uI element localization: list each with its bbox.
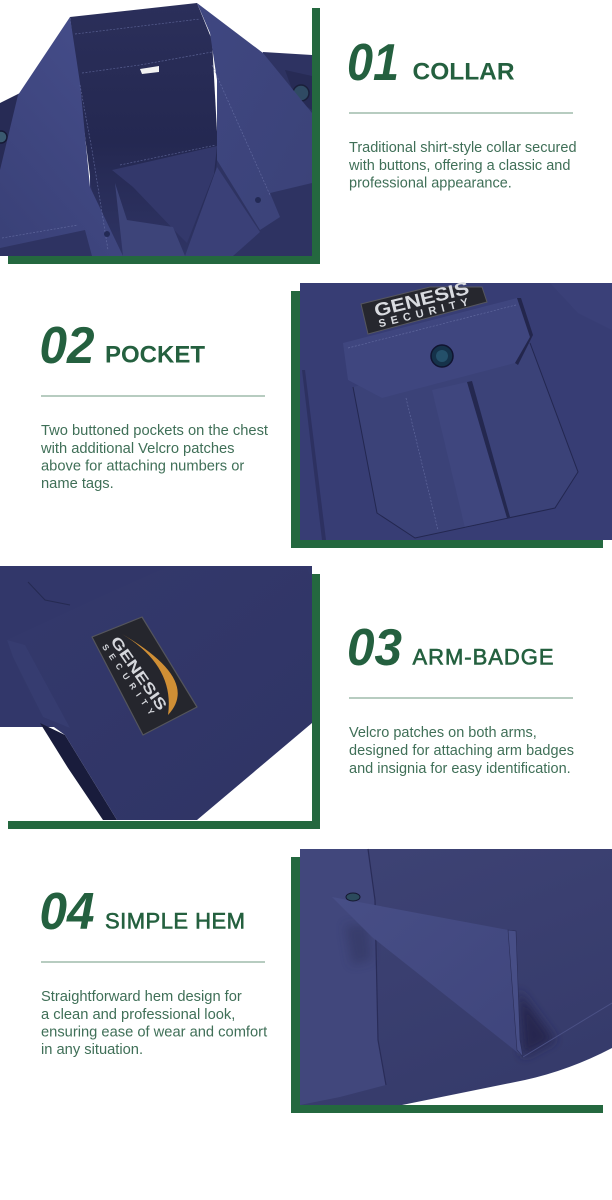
panel: arm-badge photo	[0, 566, 320, 829]
text: hem description: a clean and professional look,	[41, 1007, 235, 1023]
illustration: collar shirt	[0, 3, 312, 256]
text: hem description: in any situation.	[41, 1042, 143, 1058]
frame: arm-badge green border	[8, 574, 320, 829]
text: arm-badge description: and insignia for easy identification.	[349, 761, 571, 777]
text: hem description	[41, 989, 267, 1058]
panel: pocket photo	[291, 277, 612, 548]
heading: 04 simple hem: 04	[40, 883, 95, 941]
text: collar description: Traditional shirt-style collar secured	[349, 140, 577, 156]
panel: collar photo	[0, 3, 320, 264]
heading: 01 collar: COLLAR	[412, 58, 515, 86]
frame: pocket green border	[291, 291, 603, 548]
badge text: genesis security: SECURITY	[377, 296, 470, 330]
illustration: pocket shirt	[300, 277, 612, 540]
text: pocket description: name tags.	[41, 476, 114, 492]
text: arm-badge description	[349, 725, 574, 777]
heading: 01 collar	[347, 34, 515, 92]
frame: hem green border	[291, 857, 603, 1113]
heading: 02 pocket: POCKET	[105, 342, 205, 368]
heading: 04 simple hem: SIMPLE HEM	[105, 908, 245, 934]
heading: 03 arm-badge: ARM-BADGE	[412, 644, 554, 670]
illustration: hem	[300, 849, 612, 1105]
text: collar description	[348, 140, 577, 192]
text: hem description: Straightforward hem design for	[41, 989, 242, 1005]
text: collar description: professional appearance.	[349, 176, 512, 192]
text: arm-badge description: Velcro patches on both arms,	[349, 725, 537, 741]
text: pocket description: with additional Velcro patches	[40, 441, 235, 457]
illustration: sleeve	[0, 566, 312, 820]
heading: 01 collar: 01	[347, 34, 399, 92]
text: pocket description	[40, 423, 268, 492]
text: collar description: with buttons, offering a classic and	[348, 158, 570, 174]
badge text: genesis security: GENESIS	[107, 634, 170, 714]
badge text: genesis security: SECURITY	[100, 642, 157, 717]
text: arm-badge description: designed for attaching arm badges	[349, 743, 574, 759]
heading: 04 simple hem	[40, 883, 245, 941]
heading: 02 pocket	[40, 317, 205, 375]
heading: 02 pocket: 02	[40, 317, 95, 375]
text: pocket description: above for attaching numbers or	[41, 458, 244, 474]
text: pocket description: Two buttoned pockets on the chest	[41, 423, 268, 439]
badge text: genesis security	[372, 277, 474, 331]
panel: hem photo	[291, 849, 612, 1113]
text: hem description: ensuring ease of wear and comfort	[41, 1024, 267, 1040]
heading: 03 arm-badge: 03	[347, 619, 402, 677]
frame: collar green border	[8, 8, 320, 264]
heading: 03 arm-badge	[347, 619, 554, 677]
badge text: genesis security: GENESIS	[372, 277, 471, 321]
